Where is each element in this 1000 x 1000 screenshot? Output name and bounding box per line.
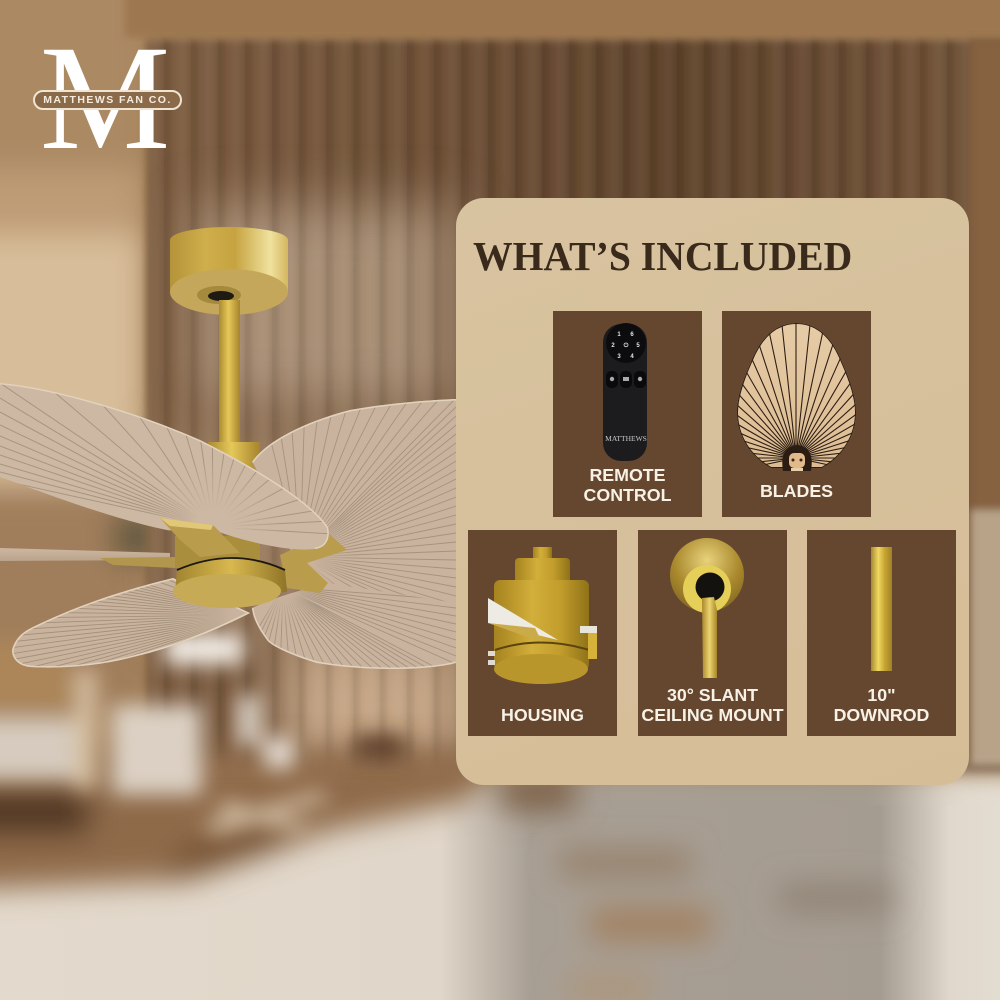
label: [834, 685, 929, 725]
blade right: [252, 399, 456, 603]
card: blades: [722, 311, 871, 517]
logo pill: [33, 90, 182, 110]
logo letter M: M: [40, 15, 170, 181]
left blade arm: [100, 557, 175, 568]
left wall: [0, 0, 160, 710]
blade lower left: [10, 576, 252, 670]
right wall strip: [970, 40, 1000, 765]
brown floor reflections: [560, 850, 890, 1000]
icon: remote: MATTHEWS: [605, 434, 647, 443]
ceiling fan: [0, 227, 456, 669]
icon: remote: 6: [630, 332, 634, 338]
icon: remote: ⏻: [624, 342, 629, 349]
floor soft edge: [0, 775, 1000, 1000]
icon: housing: [488, 547, 597, 684]
blade far left: [0, 548, 172, 562]
fan canopy and downrod: [42, 227, 291, 622]
upper left blade arm: [160, 518, 240, 557]
title: WHAT’S INCLUDED: [473, 233, 852, 279]
icon: downrod: [871, 547, 892, 671]
icon: remote: 5: [636, 343, 640, 349]
label: REMOTE: [589, 465, 666, 485]
label: 30° SLANT: [667, 685, 758, 705]
label: [584, 465, 671, 505]
blade upper left: [0, 380, 330, 552]
icon: palm blade: [737, 322, 857, 472]
card: ceiling mount: [638, 530, 787, 736]
label: 10": [867, 685, 896, 705]
label: [641, 685, 784, 725]
blade lower right: [250, 580, 456, 672]
icon: slant mount: [670, 538, 744, 678]
blurred furniture: [0, 634, 405, 835]
slat stripes: [146, 40, 972, 775]
logo: [33, 15, 182, 181]
label: BLADES: [760, 481, 833, 501]
top ceiling band: [125, 0, 1000, 37]
card: remote control: [553, 311, 702, 517]
label: CEILING MOUNT: [641, 705, 784, 725]
floor base: [0, 805, 1000, 1000]
motor housing: [173, 536, 287, 608]
label: HOUSING: [501, 705, 584, 725]
panel: what's included: [456, 198, 969, 785]
light falling on slats: [170, 205, 470, 770]
label: DOWNROD: [834, 705, 929, 725]
label: CONTROL: [584, 485, 671, 505]
icon: remote: 1: [617, 332, 621, 338]
card: downrod: [807, 530, 956, 736]
blurred rug: [0, 750, 575, 890]
slatted wall: [146, 40, 1000, 775]
icon: remote: [603, 323, 647, 461]
card: housing: [468, 530, 617, 736]
icon: remote: 3: [617, 354, 621, 360]
icon: blade hub: [782, 445, 812, 471]
right blade arm: [280, 534, 347, 593]
logo pill: MATTHEWS FAN CO.: [43, 94, 172, 106]
icon: remote: 2: [611, 343, 615, 349]
icon: remote: 4: [630, 354, 634, 360]
